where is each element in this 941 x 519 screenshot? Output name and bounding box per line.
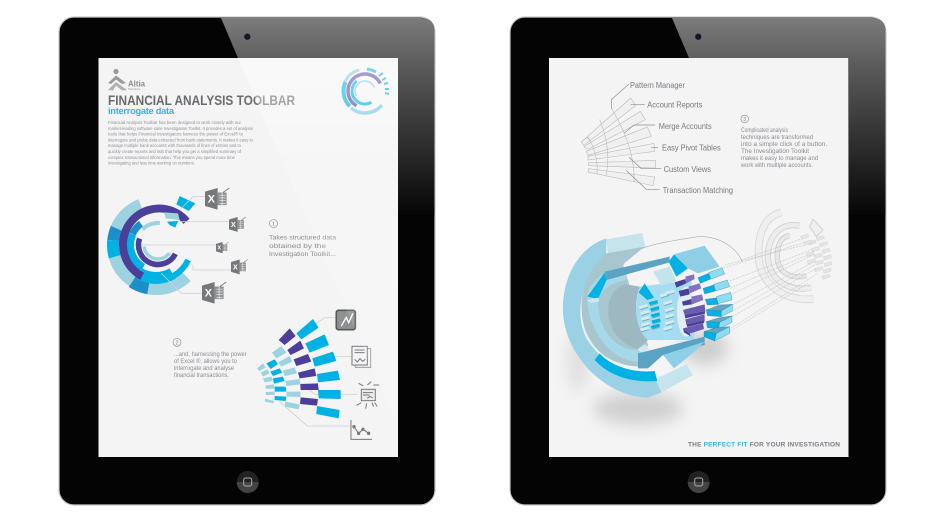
intro paragraph: quickly create reports and lists that help you get a simplified summary of (108, 149, 242, 154)
step 3 text: The Investigation Toolkit (741, 148, 809, 155)
toolbar feature labels: Merge Accounts (659, 122, 712, 131)
thin outline arc (623, 237, 742, 265)
top right block (674, 246, 720, 273)
toolbar feature labels (630, 81, 733, 195)
tablet: left (59, 17, 435, 505)
step 1 text: 1 (272, 222, 275, 228)
icon: excel 4: X (233, 262, 238, 271)
inner dark disc (608, 284, 648, 349)
intro paragraph: tools that helps Financial Investigators harness the power of Excel® to (108, 132, 244, 137)
white tab: left (587, 298, 600, 303)
icon: growth chart (336, 310, 355, 330)
icon: burst report (357, 382, 379, 409)
step 3 text: Complicated analysis (741, 127, 788, 134)
camera (695, 34, 701, 40)
toolbar feature labels: Easy Pivot Tables (662, 143, 721, 152)
centre glow (677, 287, 696, 337)
intro paragraph: market-leading software suite Investigation Toolkit. It provides a set of analysis (108, 126, 254, 131)
subtitle: interrogate data (108, 106, 175, 116)
step 3 text: 3 (743, 117, 746, 123)
step 3 text: techniques are transformed (741, 134, 813, 141)
outer ring face (563, 238, 661, 398)
screen (549, 58, 848, 457)
screen (98, 58, 398, 457)
icon: report (352, 346, 371, 367)
intro paragraph: manage multiple bank accounts with thousands of lines of entries and to (108, 143, 242, 148)
title: FINANCIAL ANALYSIS TOOLBAR (108, 92, 295, 108)
home button (237, 471, 259, 493)
outer top block (606, 233, 645, 253)
step 3 text: makes it easy to manage and (741, 155, 818, 162)
icon: excel 3: X (217, 246, 221, 252)
toolbar feature labels: Custom Views (664, 165, 711, 174)
cyan stripe (669, 254, 688, 277)
inner cylinder (636, 280, 695, 340)
step 1 text: obtained by the (269, 243, 327, 250)
cyan bottom band (595, 353, 657, 381)
shadows (568, 332, 728, 425)
bezel gloss (221, 18, 434, 215)
bezel gloss (672, 18, 886, 215)
icon: small circular emblem (334, 60, 396, 122)
step 3 text: into a simple click of a button. (741, 141, 828, 148)
intro paragraph (108, 120, 254, 166)
step 2 text: 2 (175, 340, 179, 346)
intro paragraph: Financial Analysis Toolbar has been designed to work closely with our (108, 120, 242, 125)
cyan ring piece (587, 273, 607, 299)
dashed connectors (721, 237, 818, 337)
icon: excel 2: X (231, 220, 236, 229)
step 2 text: financial transactions. (174, 372, 229, 379)
step 2 text: interrogate and analyse (174, 365, 234, 372)
step 3 text (740, 115, 828, 169)
icons: excel files (202, 188, 248, 304)
tagline: THE PERFECT FIT FOR YOUR INVESTIGATION (688, 441, 840, 448)
tablet body (59, 17, 435, 505)
ghost fan blocks (801, 234, 832, 279)
purple blocks (675, 274, 705, 336)
step 3 text: work with multiple accounts. (740, 162, 813, 169)
inner grey surface (581, 247, 648, 367)
chart: radial ring diagram (95, 184, 231, 306)
intro paragraph: complex transactional information. This means you spend more time (108, 155, 236, 160)
screen gloss over left page (238, 58, 398, 430)
toolbar feature labels: Account Reports (647, 101, 702, 110)
step 1 text: Investigation Toolkit... (269, 251, 336, 258)
step 2 text (173, 338, 247, 379)
white tab: bottom (637, 344, 649, 353)
pale blocks (639, 290, 675, 332)
icon: excel 5: X (205, 287, 213, 299)
home button (688, 471, 710, 493)
step 1 text: Takes structured data (269, 234, 336, 242)
ghost ring (759, 212, 823, 299)
intro paragraph: interrogate and probe data extracted from bank statements. It makes it easy to (108, 137, 254, 142)
light block (653, 267, 676, 286)
diagram: grey toolbar fan (581, 84, 661, 189)
middle ring (587, 273, 640, 362)
diagram: 3D exploded toolbar (563, 212, 832, 425)
top band (605, 257, 670, 280)
camera (244, 34, 250, 40)
toolbar feature labels: Transaction Matching (663, 186, 733, 195)
logo: Altia (128, 78, 145, 88)
tablet body (510, 17, 886, 505)
step 2 text: of Excel ®, allows you to (174, 357, 237, 365)
blue blocks (698, 268, 732, 341)
icon: excel 1: X (208, 193, 216, 205)
chart: fan of excel data (257, 318, 358, 426)
step 1 text (269, 220, 336, 258)
bottom light block (663, 342, 705, 368)
logo: Solutions (128, 87, 141, 91)
cyan patch (639, 283, 654, 300)
step 2 text: ...and, harnessing the power (174, 351, 247, 358)
tablet: right (510, 17, 886, 505)
icon: line chart (351, 420, 372, 439)
logo (108, 69, 145, 91)
page: financial analysis toolbar (95, 60, 396, 439)
toolbar feature labels: Pattern Manager (630, 81, 685, 90)
intro paragraph: investigating and less time working on numbers. (108, 161, 195, 166)
bottom block (655, 364, 693, 392)
bottom band (638, 337, 705, 368)
